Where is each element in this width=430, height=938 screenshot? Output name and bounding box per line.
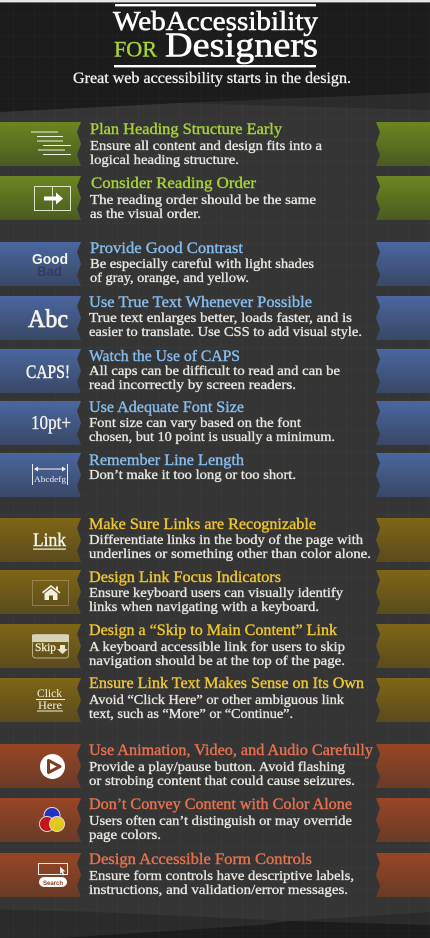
tip: Design a Skip to Main Content Link: A keyboard accessible link for users to skip — [89, 640, 345, 655]
tip: Make Sure Links are Recognizable: Differentiate links in the body of the page with — [89, 533, 363, 548]
tip: Watch the Use of CAPS: read incorrectly by screen readers. — [89, 378, 296, 393]
tip: Use Animation, Video, and Audio Carefully: or strobing content that could cause seizures. — [89, 774, 355, 789]
tip: Make Sure Links are Recognizable — [0, 516, 430, 562]
tip: Remember Line Length: Remember Line Length — [89, 452, 244, 469]
tip: Make Sure Links are Recognizable: underlines or something other than color alone. — [89, 547, 371, 562]
icon: colour circles — [40, 808, 64, 832]
icon: search form — [38, 864, 68, 887]
tip: Plan Heading Structure Early — [0, 121, 430, 168]
tip: Consider Reading Order — [0, 175, 430, 222]
tip: Design a Skip to Main Content Link: navigation should be at the top of the page. — [89, 654, 345, 669]
tip: Plan Heading Structure Early: logical heading structure. — [90, 153, 239, 168]
tip: Ensure Link Text Makes Sense — [0, 675, 430, 722]
icon: Abc: Abc — [28, 306, 68, 333]
tip: Design Accessible Form Controls — [0, 851, 430, 898]
tip: Provide Good Contrast: of gray, orange, and yellow. — [90, 271, 249, 286]
tip: Design a Skip to Main Content Link: Design a “Skip to Main Content” Link — [89, 622, 337, 639]
title: FOR — [114, 36, 157, 62]
title: WebAccessibility — [113, 5, 318, 36]
tip: Use Animation, Video, and Audio Carefully: Use Animation, Video, and Audio Carefully — [89, 742, 373, 759]
tip: Use True Text Whenever Possible: Use True Text Whenever Possible — [89, 294, 312, 311]
icon: skip: Skip — [35, 640, 56, 654]
tip: Watch the Use of CAPS: Watch the Use of CAPS — [89, 348, 240, 365]
tip: Provide Good Contrast — [0, 240, 430, 286]
icon: 10pt+: 10pt+ — [31, 412, 71, 434]
tip: Use True Text Whenever Possible: True text enlarges better, loads faster, and is — [89, 311, 352, 326]
icon: search form: Search — [43, 880, 63, 887]
icon: good bad contrast: Bad — [37, 263, 62, 279]
tip: Design a Skip to Main Content Link — [0, 622, 430, 669]
tip: Use True Text Whenever Possible — [0, 294, 430, 340]
tip: Design Accessible Form Controls: Design Accessible Form Controls — [89, 851, 312, 868]
tip: Don't Convey Content with Color Alone: Users often can’t distinguish or may override — [89, 814, 352, 829]
tip: Use Animation, Video, and Audio Carefully: Provide a play/pause button. Avoid flashing — [89, 760, 345, 775]
tip: Design Link Focus Indicators: links when navigating with a keyboard. — [89, 600, 319, 615]
tip: Design Link Focus Indicators: Design Link Focus Indicators — [89, 569, 281, 586]
icon: click here: Click — [37, 688, 62, 700]
tip: Design Link Focus Indicators: Ensure keyboard users can visually identify — [89, 586, 343, 601]
tip: Remember Line Length — [0, 452, 430, 497]
icon: play button — [40, 754, 65, 779]
tip: Ensure Link Text Makes Sense: Ensure Link Text Makes Sense on Its Own — [89, 675, 364, 692]
tip: Use Adequate Font Size: Font size can vary based on the font — [89, 416, 301, 431]
title: Designers — [165, 26, 318, 64]
title — [113, 4, 318, 67]
tip: Remember Line Length: Don’t make it too long or too short. — [89, 468, 296, 483]
tip: Consider Reading Order: Consider Reading Order — [91, 175, 257, 192]
tip: Provide Good Contrast: Provide Good Contrast — [90, 240, 244, 257]
tip: Make Sure Links are Recognizable: Make Sure Links are Recognizable — [89, 516, 316, 533]
tip: Provide Good Contrast: Be especially careful with light shades — [90, 257, 314, 272]
tip: Use True Text Whenever Possible: easier to translate. Use CSS to add visual style. — [89, 325, 362, 340]
icon: click here — [36, 688, 65, 712]
icon: line length: Abcdefg — [34, 475, 66, 484]
tip: Design Accessible Form Controls: Ensure form controls have descriptive labels, — [89, 869, 354, 884]
tip: Watch the Use of CAPS — [0, 348, 430, 393]
icon: good bad contrast — [32, 251, 68, 279]
icon: home focus — [32, 580, 68, 606]
tip: Use Adequate Font Size — [0, 399, 430, 445]
tip: Ensure Link Text Makes Sense: text, such as “More” or “Continue”. — [89, 707, 293, 722]
subtitle: Great web accessibility starts in the design. — [73, 70, 351, 87]
tip: Plan Heading Structure Early: Plan Heading Structure Early — [90, 121, 282, 138]
icon: reading order arrow — [34, 186, 70, 211]
icon: line length — [32, 464, 68, 485]
icon: skip — [32, 634, 69, 658]
tip: Use Animation, Video, and Audio Carefully — [0, 742, 430, 789]
tip: Consider Reading Order: The reading order should be the same — [90, 193, 316, 208]
tip: Plan Heading Structure Early: Ensure all content and design fits into a — [90, 139, 323, 154]
tip: Design Accessible Form Controls: instructions, and validation/error messages. — [89, 883, 348, 898]
tip: Consider Reading Order: as the visual order. — [90, 207, 201, 222]
icon: CAPS: CAPS! — [26, 362, 70, 383]
tip: Watch the Use of CAPS: All caps can be difficult to read and can be — [89, 364, 340, 379]
tip: Don't Convey Content with Color Alone: page colors. — [89, 828, 161, 843]
icon: heading lines — [31, 132, 71, 155]
icon: click here: Here — [38, 700, 62, 712]
icon: Link: Link — [33, 530, 66, 551]
tip: Don't Convey Content with Color Alone: Don’t Convey Content with Color Alone — [89, 796, 352, 813]
tip: Use Adequate Font Size: chosen, but 10 point is usually a minimum. — [89, 430, 335, 445]
tip: Don't Convey Content with Color Alone — [0, 796, 430, 843]
tip: Design Link Focus Indicators — [0, 569, 430, 615]
tip: Ensure Link Text Makes Sense: Avoid “Click Here” or other ambiguous link — [89, 693, 344, 708]
tip: Use Adequate Font Size: Use Adequate Font Size — [89, 399, 244, 416]
icon: good bad contrast: Good — [32, 251, 68, 268]
